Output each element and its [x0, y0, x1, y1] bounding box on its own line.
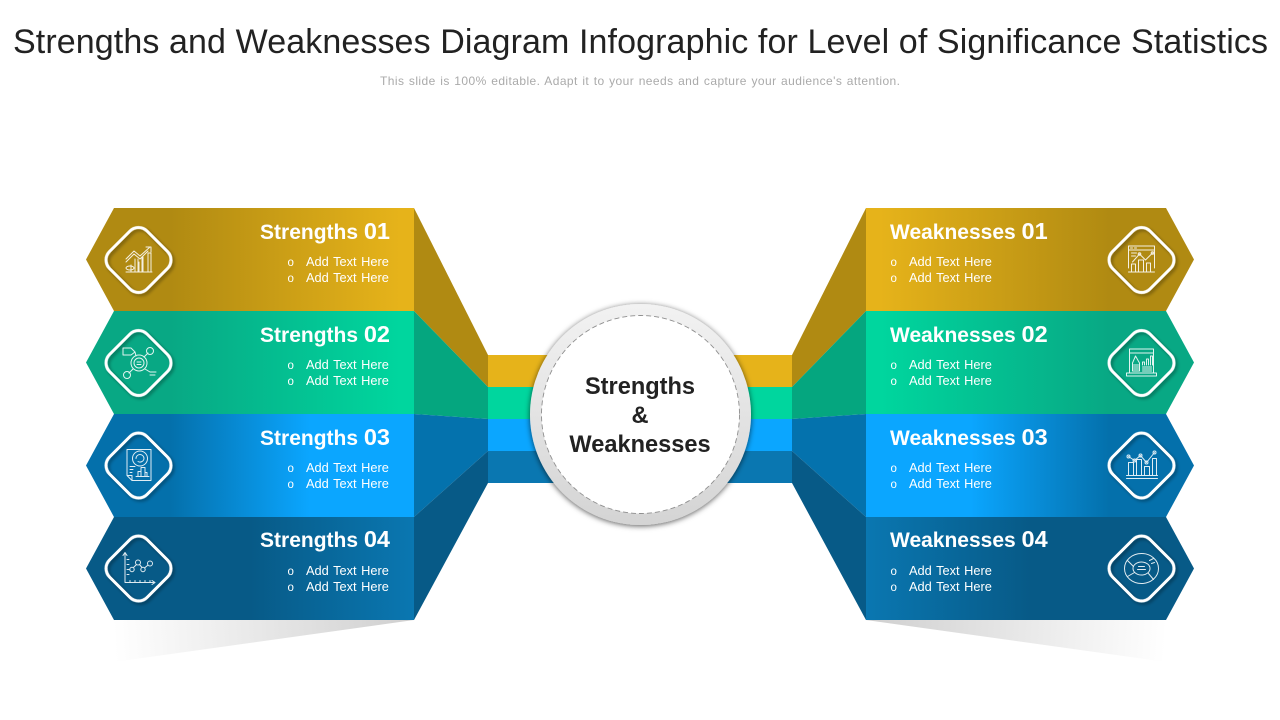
list: o [890, 479, 897, 491]
list: Add Text Here [306, 254, 389, 269]
list [890, 563, 992, 594]
panel: strengths 03 [86, 414, 488, 517]
icon: growth bar chart [126, 247, 152, 272]
icon: dashboard window [1128, 246, 1154, 272]
heading: Weaknesses 01 [890, 218, 1048, 244]
panel: strengths 04 [86, 451, 488, 620]
center label: Weaknesses [569, 432, 711, 458]
list: Add Text Here [909, 254, 992, 269]
list [288, 357, 389, 388]
list: Add Text Here [909, 270, 992, 285]
list: Add Text Here [306, 476, 389, 491]
list: Add Text Here [909, 476, 992, 491]
heading: Strengths 03 [260, 424, 390, 450]
list: Add Text Here [909, 357, 992, 372]
panel: weaknesses 01 [792, 208, 1194, 387]
list: Add Text Here [306, 460, 389, 475]
list: Add Text Here [909, 373, 992, 388]
list: Add Text Here [909, 460, 992, 475]
heading: Weaknesses 03 [890, 424, 1048, 450]
floor shadow left [114, 620, 414, 662]
panel: strengths 01 [86, 208, 488, 387]
title: Strengths and Weaknesses Diagram Infographic for Level of Significance Statistics [13, 23, 1268, 61]
list: Add Text Here [909, 563, 992, 578]
list: o [288, 376, 294, 388]
list: o [890, 376, 897, 388]
list [890, 357, 992, 388]
list: o [288, 273, 294, 285]
center circle [530, 304, 751, 525]
list: Add Text Here [909, 579, 992, 594]
list: Add Text Here [306, 563, 389, 578]
list: o [890, 257, 897, 269]
icon: bars with trend line [1126, 451, 1158, 478]
list [288, 254, 389, 285]
icon: segmented donut [1124, 554, 1158, 584]
list: o [288, 257, 294, 269]
list [288, 460, 389, 491]
list: o [890, 273, 897, 285]
heading: Weaknesses 04 [890, 526, 1048, 552]
center label: Strengths [585, 374, 695, 400]
list [288, 563, 389, 594]
panel: weaknesses 02 [792, 311, 1194, 419]
panel: strengths 02 [86, 311, 488, 419]
list: o [288, 479, 294, 491]
list: o [288, 582, 294, 594]
center label: & [631, 403, 649, 429]
center label [569, 374, 711, 458]
heading: Strengths 02 [260, 321, 390, 347]
list: o [890, 566, 897, 578]
icon: report document [127, 450, 151, 480]
list: Add Text Here [306, 357, 389, 372]
icon: laptop analytics [1126, 349, 1156, 376]
list: o [288, 566, 294, 578]
list: Add Text Here [306, 270, 389, 285]
list [890, 254, 992, 285]
center connector strips [488, 355, 792, 483]
list: Add Text Here [306, 579, 389, 594]
list: o [890, 463, 897, 475]
heading: Strengths 04 [260, 526, 390, 552]
panel: weaknesses 04 [792, 451, 1194, 620]
panel: weaknesses 03 [792, 414, 1194, 517]
heading: Strengths 01 [260, 218, 390, 244]
floor shadow right [866, 620, 1166, 662]
icon: network nodes [123, 348, 156, 378]
list: o [890, 582, 897, 594]
list: o [890, 360, 897, 372]
icon: line graph [123, 552, 155, 584]
list: Add Text Here [306, 373, 389, 388]
list [890, 460, 992, 491]
list: o [288, 360, 294, 372]
heading: Weaknesses 02 [890, 321, 1048, 347]
subtitle: This slide is 100% editable. Adapt it to your needs and capture your audience's attention. [380, 74, 900, 88]
list: o [288, 463, 294, 475]
